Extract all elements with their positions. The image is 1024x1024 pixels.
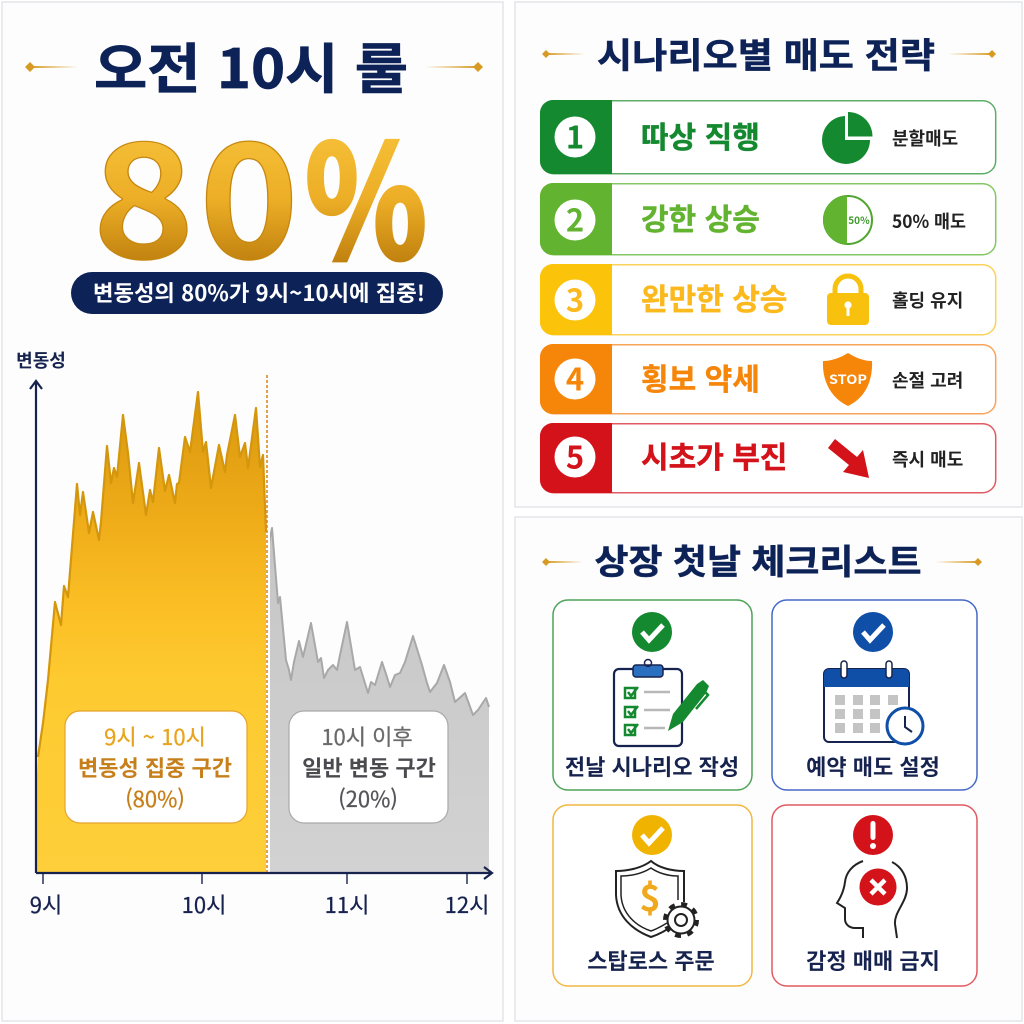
icon: shield with dollar and gear: $: [639, 870, 661, 922]
row 4: 횡보 약세: 4: [566, 354, 584, 400]
title ornament: left: [542, 50, 585, 58]
title ornament: right: [935, 558, 982, 566]
icon: head with X: [837, 861, 907, 938]
panel: 오전 10시 룰: [2, 2, 503, 1021]
icon: red exclamation: [853, 815, 893, 855]
icon: half pie 50%: 50%: [848, 212, 870, 227]
heading: 시나리오별 매도 전략: 시나리오별 매도 전략: [597, 28, 935, 79]
callout: 9시~10시: (80%): [125, 782, 185, 814]
row 3: 완만한 상승: 홀딩 유지: [892, 287, 963, 313]
row 3: 완만한 상승: 완만한 상승: [641, 275, 787, 319]
icon: yellow check: [632, 815, 672, 855]
icon: pie chart: [822, 112, 872, 164]
row 4: 횡보 약세: 손절 고려: [892, 367, 963, 393]
subtitle pill: 변동성의 80%가 9시~10시에 집중!: [93, 276, 425, 308]
axis labels: 11시: [325, 888, 369, 920]
title ornament: left: [25, 62, 78, 72]
axes: [30, 381, 492, 884]
area: after 10시 gray: [269, 528, 489, 873]
row 1: 따상 직행: [540, 100, 996, 174]
row 5: 시초가 부진: 5: [566, 432, 584, 478]
row 1: 따상 직행: 1: [566, 112, 584, 158]
subtitle pill: [71, 272, 443, 314]
icon: shield with dollar and gear: [616, 861, 697, 937]
callout: 9시~10시: 9시 ~ 10시: [104, 720, 206, 752]
callout: 9시~10시: 변동성 집중 구간: [78, 751, 232, 783]
heading: 오전 10시 룰: 오전 10시 룰: [94, 25, 408, 104]
card: 전날 시나리오 작성: [553, 600, 752, 790]
panel: 시나리오별 매도 전략: [515, 2, 1022, 507]
row 3: 완만한 상승: [540, 264, 996, 335]
row 1: 따상 직행: 따상 직행: [641, 113, 760, 157]
axis labels: 12시: [445, 888, 489, 920]
row 5: 시초가 부진: [540, 423, 996, 493]
axis labels: [30, 888, 489, 920]
title ornament: left: [542, 558, 583, 566]
row 3: 완만한 상승: 3: [566, 276, 584, 320]
row 2: 강한 상승: 50% 매도: [892, 208, 966, 234]
row 1: 따상 직행: 분할매도: [892, 125, 958, 151]
title ornament: right: [948, 50, 996, 58]
icon: stop shield: [823, 353, 872, 406]
big number: 80%: 0: [199, 78, 299, 303]
big number: 80%: %: [305, 78, 427, 303]
axis labels: 10시: [182, 888, 226, 920]
heading: 상장 첫날 체크리스트: 상장 첫날 체크리스트: [594, 534, 922, 584]
icon: blue check: [853, 612, 893, 652]
chart: volatility area chart: [16, 347, 492, 920]
callout: 10시 이후: [289, 711, 448, 823]
row 4: 횡보 약세: [540, 344, 996, 414]
card: 스탑로스 주문: 스탑로스 주문: [587, 944, 715, 976]
card: 스탑로스 주문: [553, 805, 752, 986]
row 5: 시초가 부진: 시초가 부진: [641, 433, 787, 477]
panel: 상장 첫날 체크리스트: [515, 517, 1022, 1021]
area: 9시~10시 gold: [37, 392, 267, 873]
icon: stop shield: STOP: [829, 369, 867, 388]
callout: 10시 이후: (20%): [338, 782, 398, 814]
row 2: 강한 상승: 2: [566, 196, 584, 240]
big number: 80%: 8: [92, 78, 195, 303]
card: 예약 매도 설정: 예약 매도 설정: [806, 750, 940, 782]
card: 감정 매매 금지: 감정 매매 금지: [806, 944, 940, 976]
card: 전날 시나리오 작성: 전날 시나리오 작성: [565, 750, 739, 782]
icon: clipboard and pen: [614, 660, 709, 746]
axis labels: 9시: [30, 888, 62, 920]
row 4: 횡보 약세: 횡보 약세: [641, 355, 760, 399]
icon: down arrow: [828, 439, 869, 478]
icon: calendar with clock: [824, 661, 923, 744]
card: 감정 매매 금지: [772, 805, 977, 986]
card: 예약 매도 설정: [772, 600, 977, 790]
icon: lock: [827, 276, 869, 325]
big number: 80%: [92, 78, 427, 303]
callout: 9시~10시: [65, 711, 247, 823]
title ornament: right: [425, 62, 483, 72]
axis title: 변동성: 변동성: [16, 347, 66, 373]
row 2: 강한 상승: [540, 183, 996, 255]
callout: 10시 이후: 일반 변동 구간: [302, 751, 436, 783]
row 5: 시초가 부진: 즉시 매도: [892, 446, 963, 472]
icon: half pie 50%: [823, 196, 872, 244]
icon: green check: [632, 612, 672, 652]
callout: 10시 이후: 10시 이후: [321, 720, 413, 752]
row 2: 강한 상승: 강한 상승: [641, 195, 760, 239]
